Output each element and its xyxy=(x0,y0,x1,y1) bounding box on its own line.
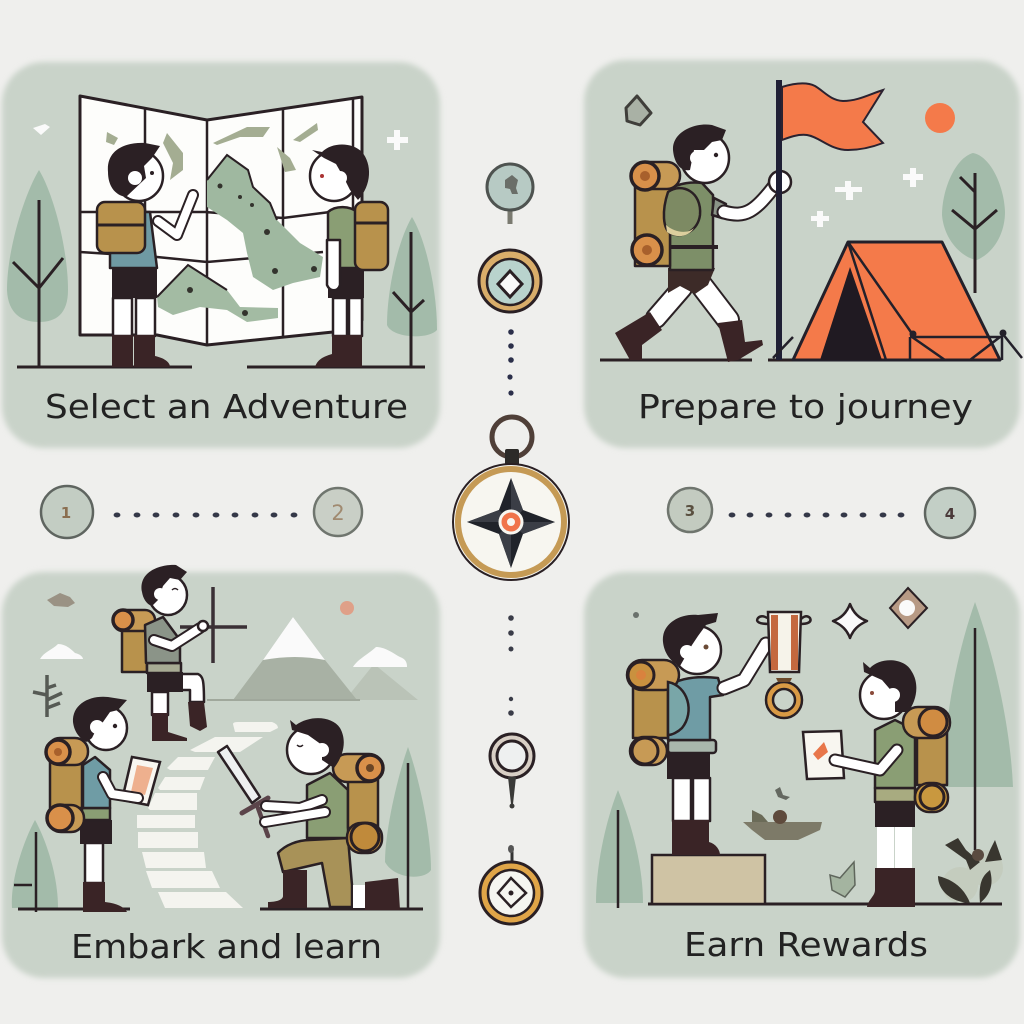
panel: embark and learn xyxy=(2,565,440,978)
map xyxy=(80,96,362,345)
panel: prepare to journey xyxy=(584,60,1022,448)
icon: step badge 2: 2 xyxy=(331,501,345,525)
icon: sparkles xyxy=(33,124,408,150)
person: climbing archer xyxy=(113,565,247,741)
person: hiker with card xyxy=(803,660,950,907)
person: hiker with card xyxy=(46,697,160,912)
icon: distant mountain xyxy=(40,617,418,700)
path xyxy=(137,722,278,908)
icon: left tree xyxy=(12,820,58,912)
icon: step badge 1: 1 xyxy=(61,504,71,522)
panel: select an adventure xyxy=(2,62,440,448)
dots xyxy=(507,329,514,396)
icon: small compass xyxy=(479,250,541,312)
small dot xyxy=(633,612,639,618)
label: embark and learn: Embark and learn xyxy=(71,927,382,966)
dots xyxy=(508,615,514,716)
icon: right tree xyxy=(385,747,431,908)
icon: lower compass xyxy=(480,845,542,924)
icon: step badge 1 xyxy=(41,486,93,538)
right step connector xyxy=(668,488,975,538)
label: select an adventure: Select an Adventure xyxy=(45,387,408,426)
ground line xyxy=(648,902,1002,906)
label: earn rewards: Earn Rewards xyxy=(684,925,928,964)
icon: back tree xyxy=(943,602,1013,850)
icon: flag xyxy=(779,80,883,360)
ground line xyxy=(17,366,425,368)
person: left hiker xyxy=(97,143,193,367)
icon: left tree xyxy=(596,790,643,908)
dots xyxy=(114,512,297,518)
icon: step badge 4: 4 xyxy=(945,505,955,523)
icon: tree xyxy=(942,153,1005,293)
icon: main compass xyxy=(453,417,569,580)
icon: ring badge xyxy=(490,734,534,808)
icon: bush xyxy=(938,838,1003,903)
icon: top badge xyxy=(487,164,533,224)
label: prepare to journey: Prepare to journey xyxy=(638,387,973,426)
icon: plant xyxy=(33,675,62,717)
icon: step badge 3 xyxy=(668,488,712,532)
icon: podium xyxy=(652,855,765,904)
icon: small marks xyxy=(47,593,354,615)
icon: right tree xyxy=(387,217,437,367)
icon: sparkle xyxy=(833,604,867,638)
icon: small plants xyxy=(743,787,855,897)
panel: earn rewards xyxy=(584,572,1020,978)
center compass path xyxy=(453,164,569,924)
icon: sparkles xyxy=(811,168,923,227)
person: hiker with flag xyxy=(615,124,791,362)
ground line xyxy=(18,908,423,910)
ground line xyxy=(600,358,1000,362)
icon: step badge 4 xyxy=(925,488,975,538)
icon: orange sun xyxy=(925,103,955,133)
person: hiker on podium xyxy=(627,613,766,855)
icon: step badge 2 xyxy=(314,488,362,536)
icon: diamond marker xyxy=(890,588,927,628)
left step connector xyxy=(41,486,362,538)
icon: step badge 3: 3 xyxy=(685,502,695,520)
icon: hexagon marker xyxy=(626,96,651,125)
icon: trophy medal xyxy=(757,612,811,718)
dots xyxy=(729,512,904,518)
icon: tent xyxy=(773,242,1022,360)
icon: left tree xyxy=(7,170,68,367)
person: right hiker xyxy=(310,144,388,367)
person: kneeling hiker with sword xyxy=(218,718,400,910)
